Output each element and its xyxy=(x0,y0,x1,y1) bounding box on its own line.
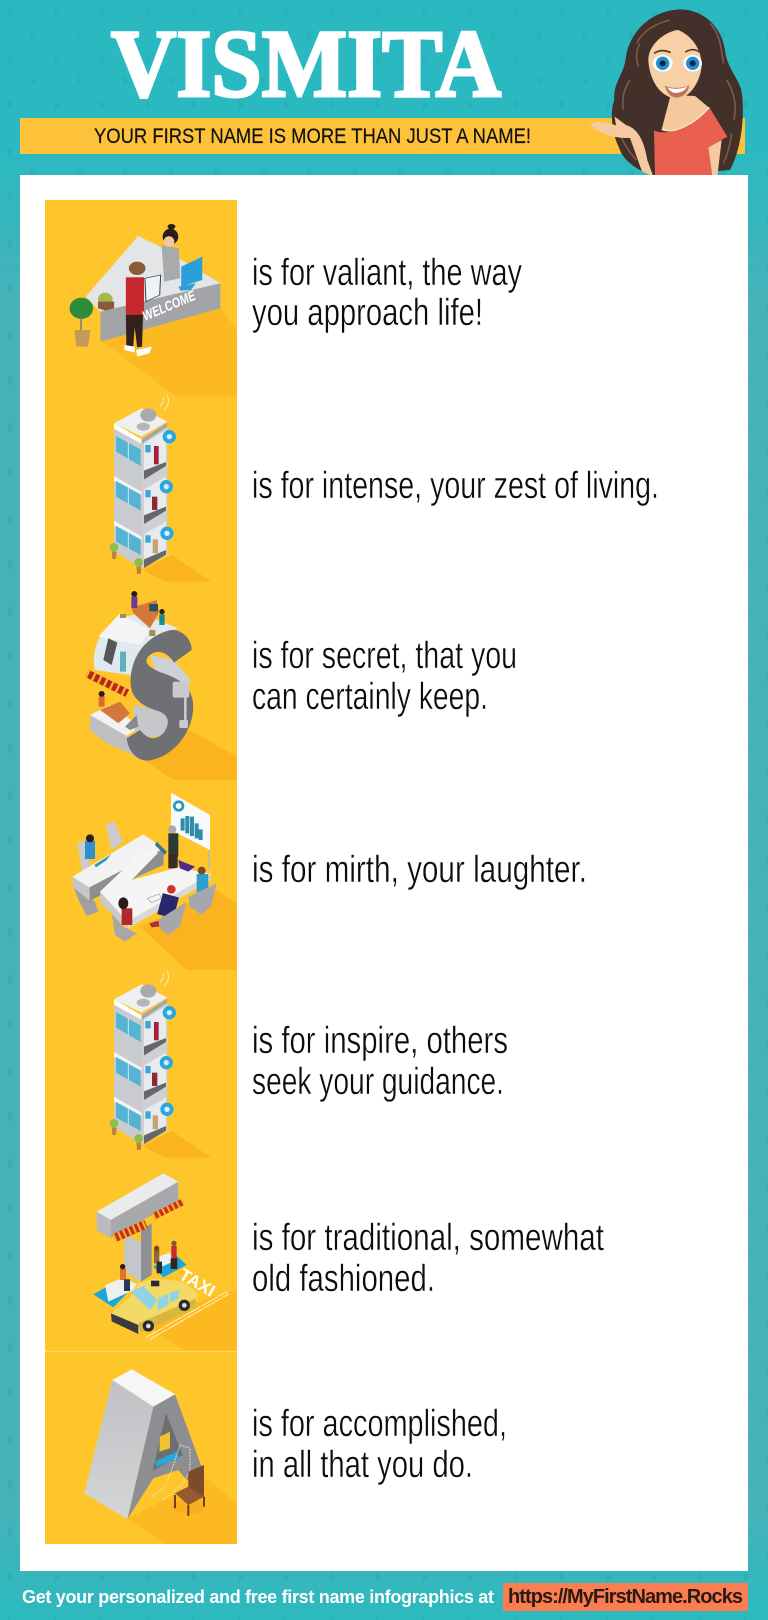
title: VISMITA xyxy=(111,10,501,117)
statement: I (inspire): is for inspire, others xyxy=(252,1020,508,1062)
statement: A: in all that you do. xyxy=(252,1444,473,1486)
footer url badge: https://MyFirstName.Rocks xyxy=(508,1586,743,1608)
label: WELCOME: WELCOME xyxy=(140,287,198,324)
illustration: letter A with chair xyxy=(84,1369,237,1544)
statement: V: is for valiant, the way xyxy=(252,252,522,294)
illustration: letter T taxi stand xyxy=(93,1173,237,1350)
footer text: Get your personalized and free first name infographics at xyxy=(22,1587,494,1607)
statement: S xyxy=(252,635,517,718)
tagline: YOUR FIRST NAME IS MORE THAN JUST A NAME! xyxy=(94,125,531,148)
statement: A xyxy=(252,1403,507,1486)
statement: I (inspire): seek your guidance. xyxy=(252,1061,504,1103)
banner xyxy=(20,118,745,154)
statement: T: is for traditional, somewhat xyxy=(252,1217,604,1259)
statement: I (inspire) xyxy=(252,1020,508,1103)
statement: A: is for accomplished, xyxy=(252,1403,507,1445)
illustration: letter I office tower xyxy=(110,395,212,582)
statement: S: can certainly keep. xyxy=(252,676,488,718)
statement: T: old fashioned. xyxy=(252,1258,435,1300)
statement: M: is for mirth, your laughter. xyxy=(252,849,587,891)
illustration: letter S office xyxy=(87,591,237,780)
character: woman presenting xyxy=(590,9,743,177)
label: TAXI: TAXI xyxy=(176,1265,218,1300)
statement: V xyxy=(252,252,522,334)
illustration: letter M meeting table xyxy=(72,793,237,970)
illustration: letter I office tower repeat xyxy=(110,971,212,1158)
yellow illustration column xyxy=(45,200,237,1544)
statement: V: you approach life! xyxy=(252,292,483,334)
statement: T xyxy=(252,1217,604,1300)
illustration: letter V reception desk xyxy=(70,224,237,397)
statement: S: is for secret, that you xyxy=(252,635,517,677)
